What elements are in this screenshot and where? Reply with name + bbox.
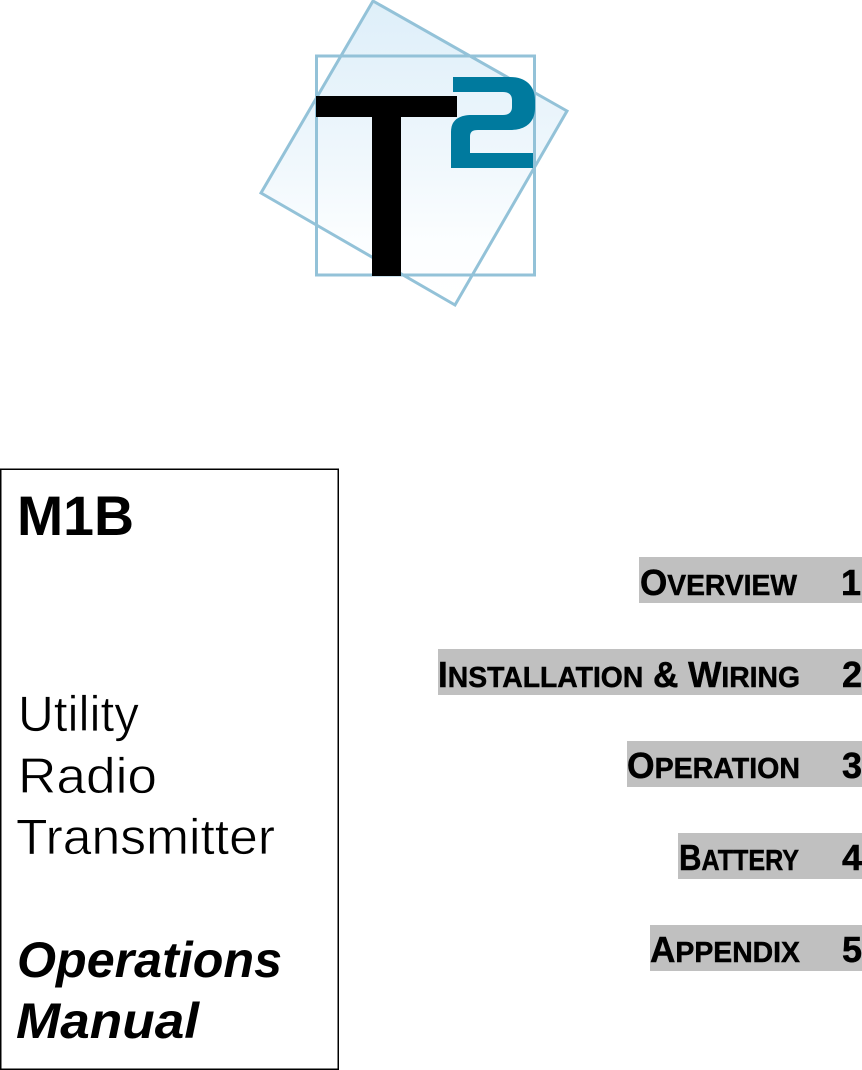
section tab: Overview 1 [639, 557, 862, 603]
document type: Operations [17, 932, 282, 988]
product description: Radio [18, 748, 157, 804]
section tab: Appendix 5 [650, 925, 862, 971]
section tab: Overview 1: OVERVIEW [640, 562, 798, 603]
upright square [316, 56, 534, 275]
section tab: Installation & Wiring 2: INSTALLATION & WIRING [438, 654, 800, 695]
section tab: Battery 4: 4 [842, 837, 862, 878]
rotated square [261, 1, 567, 305]
section tab: Battery 4: BATTERY [679, 837, 799, 878]
panel: product title box [1, 469, 338, 1069]
superscript 2 [451, 77, 535, 168]
document type [16, 932, 282, 1049]
product description: Transmitter [16, 809, 275, 865]
section tab: Operation 3 [627, 741, 862, 787]
letter T [316, 96, 457, 276]
section tab: Battery 4 [678, 833, 862, 879]
product description [16, 686, 275, 865]
logo: T2 [261, 1, 567, 305]
product description: Utility [18, 686, 139, 742]
section tab: Operation 3: 3 [842, 745, 862, 786]
section tab: Appendix 5: APPENDIX [650, 929, 801, 970]
model name: M1B [17, 484, 134, 547]
section tab: Overview 1: 1 [841, 562, 861, 603]
document type: Manual [16, 993, 200, 1049]
section tab: Operation 3: OPERATION [627, 745, 800, 786]
section tab: Appendix 5: 5 [842, 929, 862, 970]
section tab: Installation & Wiring 2: 2 [842, 654, 862, 695]
